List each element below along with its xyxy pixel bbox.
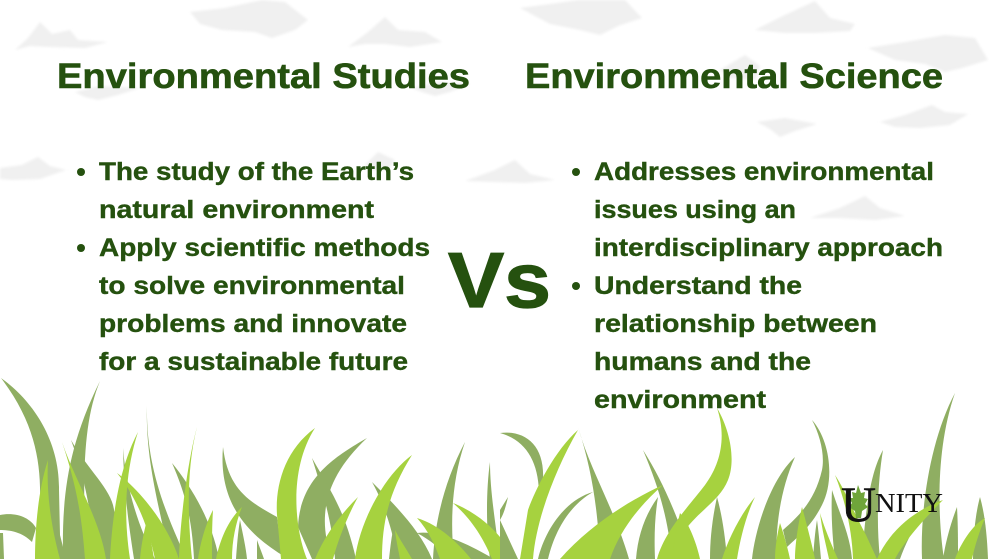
text block: Environmental Studies bullets: problems and innovate (99, 310, 407, 338)
text block: Environmental Science bullets: issues using an (594, 196, 796, 224)
text block: Environmental Studies bullets: for a sustainable future (99, 348, 408, 376)
Unity logo (841, 476, 943, 532)
logo wordmark U: U (841, 476, 876, 532)
text block: Environmental Science bullets: interdisciplinary approach (594, 234, 943, 262)
heading: Environmental Science: Environmental Science (525, 57, 943, 96)
text block: Environmental Studies bullets: to solve environmental (99, 272, 405, 300)
heading: Environmental Studies: Environmental Studies (57, 57, 470, 96)
icon: green leaf (849, 485, 868, 518)
text block: Environmental Science bullets: Addresses environmental (594, 158, 934, 186)
text block: Environmental Studies bullets: The study of the Earth’s (99, 158, 414, 186)
versus label: Vs (448, 236, 551, 324)
clouds (0, 0, 988, 220)
text block: Environmental Science bullets: environment (594, 386, 767, 414)
logo wordmark NITY: NITY (875, 488, 943, 518)
text block: Environmental Science bullets: relationship between (594, 310, 877, 338)
text block: Environmental Science bullets: Understand the (594, 272, 802, 300)
text block: Environmental Science bullets: humans and the (594, 348, 811, 376)
text block: Environmental Studies bullets: Apply scientific methods (99, 234, 430, 262)
grass illustration (0, 378, 988, 559)
light grass blades (35, 408, 985, 559)
text block: Environmental Studies bullets (77, 158, 430, 376)
dark grass blades (0, 378, 988, 559)
text block: Environmental Studies bullets: natural environment (99, 196, 375, 224)
text block: Environmental Science bullets (572, 158, 943, 414)
